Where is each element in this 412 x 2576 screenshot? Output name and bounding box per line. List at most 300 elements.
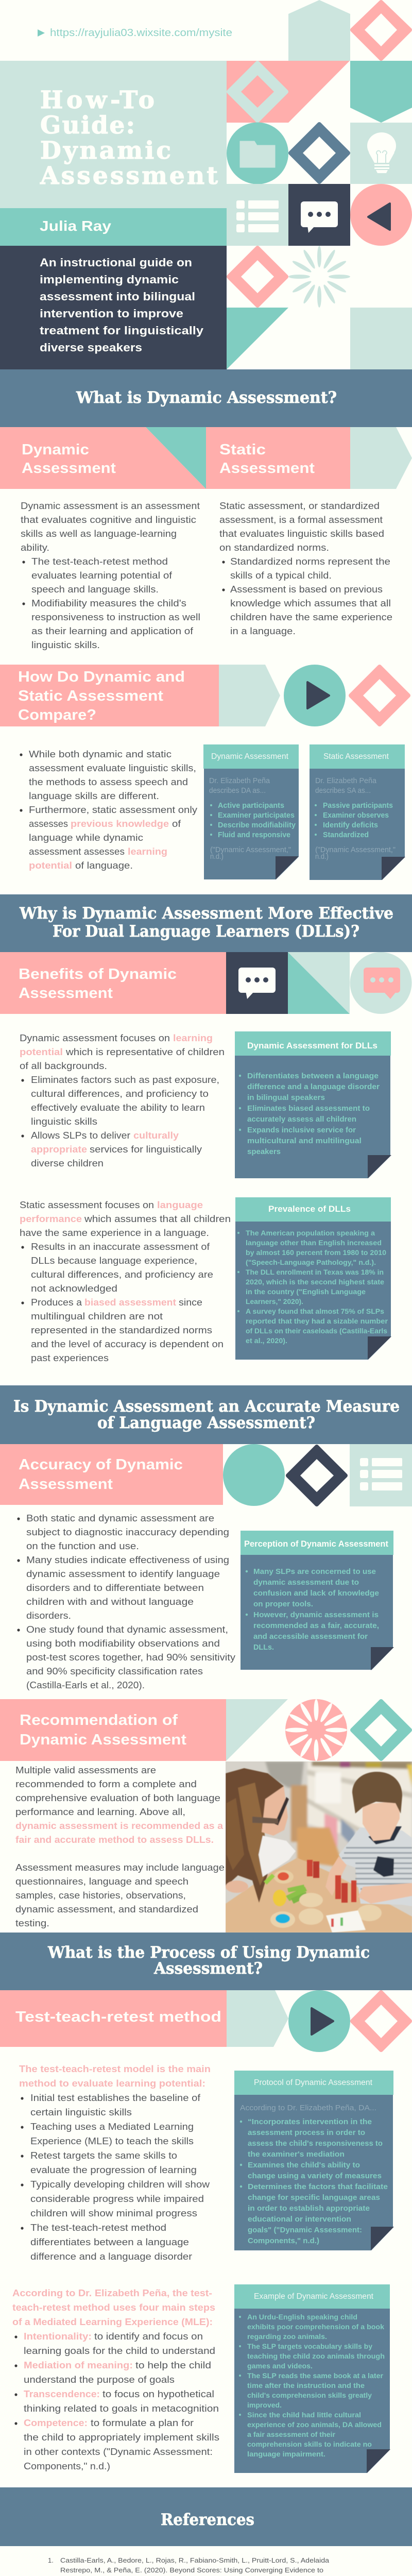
card: prevalence of DLLs: A survey found that almost 75% of SLPs — [246, 1307, 384, 1315]
panel: subtitle: intervention to improve — [40, 307, 183, 320]
text block: test-teach-retest model: Experience (MLE) to teach the skills — [30, 2136, 194, 2146]
text block: static assessment definition — [219, 501, 392, 636]
panel: how do they compare — [0, 665, 408, 880]
text block: static assessment definition: that evaluates linguistic skills based — [219, 529, 384, 539]
card: dynamic assessment description: Describe modifiability — [218, 821, 296, 829]
text block: dynamic assessment definition: Dynamic assessment is an assessment — [21, 501, 200, 511]
text block: comparison bullets: assesses — [29, 819, 68, 829]
text block: static assessment definition: Assessment is based on previous — [230, 584, 383, 595]
text block: four steps of MLE: Components," n.d.) — [24, 2461, 110, 2471]
panel: subtitle: assessment into bilingual — [40, 290, 195, 303]
text block: benefits: cultural differences, and proficiency to — [31, 1089, 209, 1099]
text block: test-teach-retest model: considerable progress while impaired — [30, 2194, 204, 2204]
card: protocol of dynamic assessment: goals" ("Dynamic Assessment: — [248, 2226, 362, 2234]
panel: title background — [0, 61, 227, 208]
title: Assessment — [40, 162, 218, 190]
card: perception of dynamic assessment: Perception of Dynamic Assessment — [244, 1539, 389, 1549]
text block: test-teach-retest model: Teaching uses a Mediated Learning — [30, 2122, 194, 2132]
text block: dynamic assessment definition — [21, 501, 200, 650]
card: protocol of dynamic assessment: “Incorporates intervention in the — [248, 2117, 372, 2126]
text block: benefits: diverse children — [31, 1158, 104, 1168]
panel: subtitle: diverse speakers — [40, 341, 142, 354]
card: protocol of dynamic assessment: in order to establish appropriate — [248, 2204, 370, 2213]
title — [40, 86, 218, 190]
text block: accuracy bullets: (Castilla-Earls et al., 2020). — [26, 1680, 145, 1690]
card: perception of dynamic assessment: confusion and lack of knowledge — [253, 1589, 379, 1598]
card: example of dynamic assessment: language impairment. — [247, 2450, 325, 2458]
text block: recommendation: recommended to form a complete and — [15, 1779, 197, 1789]
text block: static assessment definition: knowledge which assumes that all — [230, 598, 391, 608]
reference list — [46, 2556, 355, 2576]
card: dynamic assessment description: describes DA as... — [209, 786, 266, 795]
text block: static assessment drawbacks: not acknowledged — [31, 1283, 117, 1294]
icon: play button — [288, 1990, 350, 2052]
heading band — [0, 1933, 412, 1990]
text block: dynamic assessment definition: speech and language skills. — [31, 584, 159, 595]
text block: static assessment drawbacks: represented in the standardized norms — [31, 1325, 212, 1335]
card: prevalence of DLLs: The DLL enrollment in Texas was 18% in — [246, 1268, 384, 1276]
subheading: how do they compare: How Do Dynamic and — [18, 669, 185, 685]
woman — [226, 1768, 296, 1903]
card: example of dynamic assessment: experience of zoo animals, DA allowed — [247, 2420, 382, 2429]
text block: benefits: Dynamic assessment focuses on — [20, 1033, 170, 1043]
heading band: References — [161, 2511, 254, 2529]
text block: comparison bullets: While both dynamic and static — [29, 749, 171, 759]
text block: accuracy bullets: One study found that dynamic assessment, — [26, 1624, 228, 1635]
text block: four steps of MLE — [12, 2288, 219, 2471]
text block: accuracy bullets: children with and without language — [26, 1597, 194, 1607]
text block: accuracy bullets — [17, 1513, 235, 1690]
card: example of dynamic assessment: An Urdu-English speaking child — [247, 2313, 357, 2321]
subheading: benefits: Benefits of Dynamic — [19, 966, 177, 982]
text block: test-teach-retest model: Initial test establishes the baseline of — [30, 2093, 201, 2103]
text block: dynamic assessment definition: responsiveness to instruction as well — [31, 612, 200, 622]
text block: accuracy bullets: disorders and to differentiate between — [26, 1583, 204, 1593]
card: static assessment description: ("Dynamic Assessment," — [315, 845, 396, 854]
panel: author — [0, 208, 227, 246]
text block: dynamic assessment definition: evaluates learning potential of — [31, 570, 173, 581]
card: example of dynamic assessment: games and videos. — [247, 2362, 313, 2370]
panel: process of using dynamic assessment — [0, 1933, 412, 2473]
panel: recommendation of dynamic assessment — [0, 1699, 412, 1933]
icon: list — [227, 184, 288, 246]
heading band: of Language Assessment? — [97, 1414, 315, 1432]
text block: static assessment drawbacks — [20, 1200, 231, 1363]
shape: house tile — [288, 0, 350, 61]
shape: split triangles — [288, 952, 350, 1014]
text block: recommendation: comprehensive evaluation of both language — [15, 1793, 220, 1803]
text block: four steps of MLE: to focus on hypothetical — [102, 2389, 214, 2399]
icon: burst — [288, 246, 350, 308]
card: example of dynamic assessment: Since the child had little cultural — [247, 2411, 361, 2419]
text block: recommendation — [15, 1765, 225, 1928]
card: prevalence of DLLs: Prevalence of DLLs — [268, 1205, 351, 1214]
shape: light teal triangle — [226, 1699, 288, 1761]
subheading: accuracy: Assessment — [19, 1476, 113, 1493]
card: static assessment description: Examiner observes — [323, 811, 389, 820]
card: dynamic assessment description: ("Dynamic Assessment," — [210, 845, 291, 854]
heading band: Is Dynamic Assessment an Accurate Measure — [13, 1397, 400, 1416]
panel: header — [0, 0, 412, 369]
subheading: static assessment: Static — [219, 442, 266, 458]
panel: subtitle — [0, 246, 227, 369]
text block: four steps of MLE: the child to appropriately implement skills — [24, 2432, 219, 2443]
text block: benefits: linguistic skills — [31, 1116, 97, 1127]
text block: comparison bullets: of language. — [75, 860, 133, 871]
card: protocol of dynamic assessment — [234, 2071, 394, 2251]
text block: static assessment definition: Static assessment, or standardized — [219, 501, 380, 511]
subheading: how do they compare: Compare? — [18, 707, 96, 723]
shape: teal circle — [223, 1444, 285, 1506]
icon: list — [350, 1444, 412, 1506]
card: static assessment description: Passive participants — [323, 801, 393, 810]
text block: dynamic assessment definition: ability. — [21, 543, 49, 553]
text block: four steps of MLE: thinking related to goals in metacognition — [24, 2403, 219, 2414]
card: perception of dynamic assessment: and accessible assessment for — [253, 1632, 368, 1641]
subheading: recommendation: Dynamic Assessment — [20, 1732, 186, 1748]
panel: references — [0, 2487, 412, 2576]
text block: benefits: appropriate — [31, 1144, 87, 1155]
text block: comparison bullets: the methods to assess speech and — [29, 777, 188, 787]
text block: accuracy bullets: subject to diagnostic inaccuracy depending — [26, 1527, 229, 1537]
card: perception of dynamic assessment: recommended as a fair, accurate, — [253, 1621, 379, 1630]
card: protocol of dynamic assessment: change using a variety of measures — [248, 2172, 382, 2180]
text block: dynamic assessment definition: skills as well as language-learning — [21, 529, 177, 539]
heading band — [0, 369, 412, 427]
panel: accuracy of dynamic assessment — [0, 1385, 412, 1690]
card: example of dynamic assessment: The SLP targets vocabulary skills by — [247, 2342, 372, 2350]
text block: accuracy bullets: on the function and use. — [26, 1541, 139, 1551]
subheading: dynamic assessment: Assessment — [22, 460, 116, 477]
icon: light bulb — [350, 123, 412, 184]
card: example of dynamic assessment: improved. — [247, 2401, 282, 2409]
card: perception of dynamic assessment: DLLs. — [253, 1643, 274, 1652]
subheading: recommendation: Recommendation of — [20, 1712, 178, 1728]
text block: static assessment definition: children have the same experience — [230, 612, 392, 622]
card: prevalence of DLLs: by almost 160 percent from 1980 to 2010 — [246, 1248, 386, 1257]
card: perception of dynamic assessment: However, dynamic assessment is — [253, 1611, 379, 1619]
card: prevalence of DLLs: et al., 2020). — [246, 1336, 287, 1345]
boy — [325, 1772, 412, 1906]
card: protocol of dynamic assessment: educational or intervention — [248, 2215, 351, 2224]
icon: folder — [227, 123, 288, 184]
text block: static assessment definition: on standardized norms. — [219, 543, 329, 553]
panel: subtitle: An instructional guide on — [40, 256, 192, 269]
card: dynamic assessment for DLLs: difference and a language disorder — [247, 1082, 380, 1091]
card: prevalence of DLLs: 2020, which is the second highest state — [246, 1278, 384, 1286]
shape: pink diamond ring lower — [229, 248, 286, 306]
card: dynamic assessment for DLLs: multicultural and multilingual — [247, 1137, 362, 1145]
card: example of dynamic assessment: time after the instruction and the — [247, 2381, 365, 2389]
card: protocol of dynamic assessment: assessment process in order to — [248, 2128, 365, 2137]
text block: recommendation: Multiple valid assessments are — [15, 1765, 156, 1775]
card: prevalence of DLLs: reported that they had a sizable number — [246, 1317, 388, 1325]
text block: four steps of MLE: to help the child — [135, 2360, 211, 2370]
blurred room background — [265, 1761, 412, 1868]
icon: pink speech bubble — [350, 952, 412, 1014]
card: protocol of dynamic assessment: Determines the factors that facilitate — [248, 2182, 388, 2191]
shape: pink diamond ring — [352, 2, 410, 59]
text block: comparison bullets: Furthermore, static assessment only — [29, 805, 197, 815]
text block: benefits: of all backgrounds. — [20, 1061, 107, 1071]
text block: comparison bullets: assessment evaluate linguistic skills, — [29, 763, 196, 773]
text block: four steps of MLE: According to Dr. Elizabeth Peña, the test- — [12, 2288, 212, 2298]
text block: recommendation: performance and learning. Above all, — [15, 1807, 185, 1817]
card: static assessment description: Identify deficits — [323, 821, 378, 829]
link: website url: https://rayjulia03.wixsite.com/mysite — [50, 27, 232, 39]
heading band: For Dual Language Learners (DLLs)? — [53, 922, 359, 941]
title: How-To — [40, 86, 154, 114]
text block: comparison bullets — [20, 749, 197, 871]
subheading: dynamic assessment: Dynamic — [22, 442, 89, 458]
heading band: What is Dynamic Assessment? — [76, 388, 337, 407]
card: example of dynamic assessment: Example of Dynamic Assessment — [254, 2292, 374, 2301]
text block: comparison bullets: assessment assesses — [29, 846, 125, 857]
text block: static assessment drawbacks: language — [157, 1200, 203, 1210]
card: protocol of dynamic assessment: the examiner's mediation — [248, 2150, 345, 2159]
shape: pink diamond ring — [352, 1992, 410, 2050]
text block: test-teach-retest model: difference and a language disorder — [30, 2251, 192, 2262]
text block: accuracy bullets: post-test scores together, had 90% sensitivity — [26, 1652, 235, 1663]
card: dynamic assessment for DLLs: Dynamic Assessment for DLLs — [247, 1041, 377, 1050]
shape: teal pennant — [350, 61, 412, 123]
text block: dynamic assessment definition: linguistic skills. — [31, 640, 100, 650]
card: protocol of dynamic assessment: According to Dr. Elizabeth Peña, DA... — [240, 2104, 376, 2112]
text block: benefits: Allows SLPs to deliver — [31, 1130, 130, 1141]
text block: recommendation: Assessment measures may include language — [15, 1862, 225, 1873]
card: prevalence of DLLs: language other than English increased — [246, 1239, 382, 1247]
shape: light teal tile — [350, 308, 412, 369]
heading band: What is the Process of Using Dynamic — [47, 1943, 370, 1962]
text block: benefits: effectively evaluate the ability to learn — [31, 1103, 205, 1113]
card: dynamic assessment description: Fluid and responsive — [218, 831, 290, 839]
text block: test-teach-retest model: certain linguistic skills — [30, 2107, 132, 2117]
card: prevalence of DLLs: The American population speaking a — [246, 1229, 375, 1237]
card: prevalence of DLLs: Learners," 2020). — [246, 1297, 303, 1306]
text block: comparison bullets: language skills are different. — [29, 791, 159, 801]
subheading: static assessment: Assessment — [219, 460, 315, 477]
card: protocol of dynamic assessment: Examines the child's ability to — [248, 2161, 360, 2170]
text block: static assessment drawbacks: since — [179, 1297, 202, 1308]
text block: comparison bullets: learning — [128, 846, 167, 857]
text block: recommendation: testing. — [15, 1918, 49, 1928]
text block: benefits: learning — [173, 1033, 213, 1043]
text block: test-teach-retest model: Typically developing children will show — [30, 2179, 210, 2190]
shape: teal triangle — [227, 308, 288, 369]
text block: test-teach-retest model: The test-teach-retest method — [30, 2223, 166, 2233]
text block: test-teach-retest model: method to evaluate learning potential: — [19, 2078, 205, 2089]
text block: static assessment definition: assessment, is a formal assessment — [219, 515, 383, 525]
icon: pink burst — [285, 1699, 347, 1761]
subheading: test-teach-retest — [0, 1990, 288, 2047]
text block: four steps of MLE: of a Mediated Learning Experience (MLE): — [12, 2317, 213, 2327]
text block: static assessment drawbacks: DLLs because language experience, — [31, 1256, 197, 1266]
text block: static assessment drawbacks: which assumes that all children — [84, 1214, 231, 1224]
subheading: static assessment — [206, 427, 412, 489]
text block: four steps of MLE: Intentionality: — [24, 2331, 92, 2342]
text block: static assessment drawbacks: Static assessment focuses on — [20, 1200, 154, 1210]
card: example of dynamic assessment: teaching the child zoo animals through — [247, 2352, 385, 2360]
text block: static assessment drawbacks: and the level of accuracy is dependent on — [31, 1339, 224, 1349]
text block: accuracy bullets: Both static and dynamic assessment are — [26, 1513, 214, 1523]
text block: dynamic assessment definition: that evaluates cognitive and linguistic — [21, 515, 196, 525]
text block: dynamic assessment definition: as their learning and application of — [31, 626, 194, 636]
panel: author: Julia Ray — [40, 218, 111, 234]
reference list: 1. — [48, 2556, 54, 2564]
card: dynamic assessment description: Examiner participates — [218, 811, 295, 820]
text block: dynamic assessment definition: Modifiability measures the child's — [31, 598, 186, 608]
card: dynamic assessment for DLLs: Differentiates between a language — [247, 1072, 379, 1080]
card: dynamic assessment for DLLs: speakers — [247, 1147, 281, 1156]
text block: static assessment definition: Standardized norms represent the — [230, 556, 390, 567]
text block: test-teach-retest model: The test-teach-retest model is the main — [19, 2064, 211, 2074]
icon: back arrow — [350, 184, 412, 246]
reference list: Restrepo, M., & Peña, E. (2020). Beyond Scores: Using Converging Evidence to — [60, 2566, 323, 2574]
card: perception of dynamic assessment: dynamic assessment due to — [253, 1578, 359, 1587]
text block: four steps of MLE: to formulate a plan for — [91, 2418, 194, 2428]
shape: pink diamond ring — [351, 667, 408, 724]
card: perception of dynamic assessment — [241, 1531, 394, 1671]
text block: static assessment drawbacks: Results in an inaccurate assessment of — [31, 1242, 210, 1252]
card: perception of dynamic assessment: Many SLPs are concerned to use — [253, 1567, 376, 1576]
text block: static assessment drawbacks: past experiences — [31, 1353, 109, 1363]
card: example of dynamic assessment — [234, 2284, 390, 2473]
text block: benefits — [20, 1033, 225, 1168]
text block: static assessment definition: skills of a typical child. — [230, 570, 332, 581]
heading band — [0, 894, 412, 952]
text block: static assessment definition: in a language. — [230, 626, 296, 636]
subheading: how do they compare: Static Assessment — [18, 688, 163, 704]
text block: accuracy bullets: using both modifiability observations and — [26, 1638, 220, 1649]
card: example of dynamic assessment: regarding zoo animals. — [247, 2332, 327, 2341]
shape: pink trapezoid with diamond — [227, 61, 350, 123]
heading band — [0, 2487, 412, 2546]
text block: recommendation: dynamic assessment is recommended as a — [15, 1821, 224, 1831]
icon: dark speech bubble — [226, 952, 288, 1014]
subheading: accuracy: Accuracy of Dynamic — [19, 1456, 183, 1473]
card: protocol of dynamic assessment: assess the child's responsiveness to — [248, 2139, 383, 2148]
card: dynamic assessment for DLLs: accurately assess all children — [247, 1115, 356, 1124]
heading band: Why is Dynamic Assessment More Effective — [19, 904, 393, 923]
subheading: how do they compare — [0, 665, 280, 726]
card: prevalence of DLLs: of DLLs on their caseloads (Castilla-Earls — [246, 1327, 387, 1335]
card: protocol of dynamic assessment: change for specific language areas — [248, 2193, 380, 2202]
card: example of dynamic assessment: child's comprehension skills greatly — [247, 2391, 372, 2399]
text block: static assessment drawbacks: biased assessment — [84, 1297, 176, 1308]
card: perception of dynamic assessment: on proper tools. — [253, 1600, 313, 1608]
text block: static assessment drawbacks: Produces a — [31, 1297, 82, 1308]
text block: four steps of MLE: learning goals for the child to understand — [24, 2346, 215, 2356]
card: protocol of dynamic assessment: Components," n.d.) — [248, 2236, 319, 2245]
photo: therapist and child with toys — [226, 1761, 412, 1933]
text block: comparison bullets: previous knowledge — [71, 819, 169, 829]
card: static assessment description: describes SA as... — [315, 786, 371, 795]
panel: why more effective for DLLs — [0, 894, 412, 1363]
card: dynamic assessment for DLLs — [235, 1031, 391, 1179]
subheading: benefits — [0, 952, 226, 1014]
subheading: accuracy — [0, 1444, 223, 1505]
panel: subtitle: treatment for linguistically — [40, 324, 204, 337]
text block: four steps of MLE: understand the purpose of goals — [24, 2375, 175, 2385]
text block: test-teach-retest model: Retest targets the same skills to — [30, 2150, 177, 2161]
text block: benefits: potential — [20, 1047, 63, 1057]
card: dynamic assessment description: Dynamic Assessment — [211, 752, 289, 761]
text block: four steps of MLE: Competence: — [24, 2418, 88, 2428]
text block: benefits: culturally — [133, 1130, 179, 1141]
reference list: Castilla-Earls, A., Bedore, L., Rojas, R., Fabiano-Smith, L., Pruitt-Lord, S., Adelaida — [60, 2556, 330, 2564]
shape: dark diamond ring — [288, 1447, 346, 1504]
text block: four steps of MLE: Transcendence: — [24, 2389, 100, 2399]
text block: static assessment drawbacks: multilingual children are not — [31, 1311, 163, 1321]
card: example of dynamic assessment: comprehension skills to indicate no — [247, 2440, 372, 2448]
card: dynamic assessment for DLLs: Eliminates biased assessment to — [247, 1104, 370, 1113]
subheading: test-teach-retest: Test-teach-retest method — [15, 2009, 221, 2025]
card: static assessment description: Dr. Elizabeth Peña — [315, 776, 377, 785]
title: Guide: — [40, 111, 135, 140]
panel: subtitle: implementing dynamic — [40, 273, 179, 286]
text block: test-teach-retest model — [19, 2064, 211, 2262]
card: dynamic assessment description — [203, 744, 299, 880]
card: static assessment description — [310, 744, 405, 880]
text block: test-teach-retest model: evaluate the progression of learning — [30, 2165, 197, 2175]
card: dynamic assessment description: Active participants — [218, 801, 284, 810]
text block: comparison bullets: language while dynamic — [29, 833, 143, 843]
text block: static assessment drawbacks: performance — [20, 1214, 82, 1224]
shape: teal diamond ring — [352, 1701, 410, 1759]
text block: comparison bullets: of — [172, 819, 181, 829]
subheading: benefits: Assessment — [19, 985, 113, 1002]
text block: benefits: Eliminates factors such as past exposure, — [31, 1075, 219, 1085]
text block: accuracy bullets: Many studies indicate effectiveness of using — [26, 1555, 229, 1565]
text block: recommendation: samples, case histories, observations, — [15, 1890, 186, 1901]
text block: test-teach-retest model: children will show minimal progress — [30, 2208, 197, 2218]
text block: accuracy bullets: disorders. — [26, 1611, 71, 1621]
shape: slate diamond ring — [290, 124, 348, 182]
heading band: Assessment? — [153, 1959, 263, 1978]
text block: four steps of MLE: teach-retest method uses four main steps — [12, 2302, 215, 2313]
card: static assessment description: Static Assessment — [323, 752, 389, 761]
text block: accuracy bullets: and 90% specificity classification rates — [26, 1666, 203, 1676]
card: prevalence of DLLs: ("Speech-Language Pathology," n.d.). — [246, 1258, 376, 1266]
text block: accuracy bullets: dynamic assessment to identify language — [26, 1569, 220, 1579]
table — [226, 1858, 412, 1933]
text block: test-teach-retest model: differentiates between a language — [30, 2237, 189, 2247]
text block: dynamic assessment definition: The test-teach-retest method — [31, 556, 168, 567]
card: dynamic assessment description: n.d.) — [210, 852, 224, 861]
subheading: recommendation — [0, 1699, 226, 1761]
text block: recommendation: dynamic assessment, and standardized — [15, 1904, 198, 1914]
text block: recommendation: fair and accurate method to assess DLLs. — [15, 1835, 214, 1845]
card: static assessment description: n.d.) — [315, 852, 329, 861]
text block: four steps of MLE: in other contexts ("Dynamic Assessment: — [24, 2447, 213, 2457]
subheading: dynamic assessment — [0, 427, 206, 489]
card: dynamic assessment for DLLs: Expands inclusive service for — [247, 1126, 356, 1134]
text block: static assessment drawbacks: have the same experience in a language. — [20, 1228, 209, 1238]
toys — [264, 1860, 382, 1933]
panel: what is dynamic assessment — [0, 369, 412, 650]
text block: benefits: services for linguistically — [90, 1144, 202, 1155]
text block: static assessment drawbacks: cultural differences, and proficiency are — [31, 1269, 213, 1280]
text block: four steps of MLE: to identify and focus on — [94, 2331, 203, 2342]
icon: play button — [284, 665, 346, 726]
heading band — [0, 1385, 412, 1444]
card: example of dynamic assessment: exhibits poor comprehension of a book — [247, 2323, 384, 2331]
card: protocol of dynamic assessment: Protocol of Dynamic Assessment — [254, 2078, 373, 2087]
text block: benefits: which is representative of children — [65, 1047, 225, 1057]
card: dynamic assessment description: Dr. Elizabeth Peña — [209, 776, 270, 785]
card: dynamic assessment for DLLs: in bilingual speakers — [247, 1093, 325, 1102]
card: example of dynamic assessment: a fair assessment of their — [247, 2430, 336, 2438]
